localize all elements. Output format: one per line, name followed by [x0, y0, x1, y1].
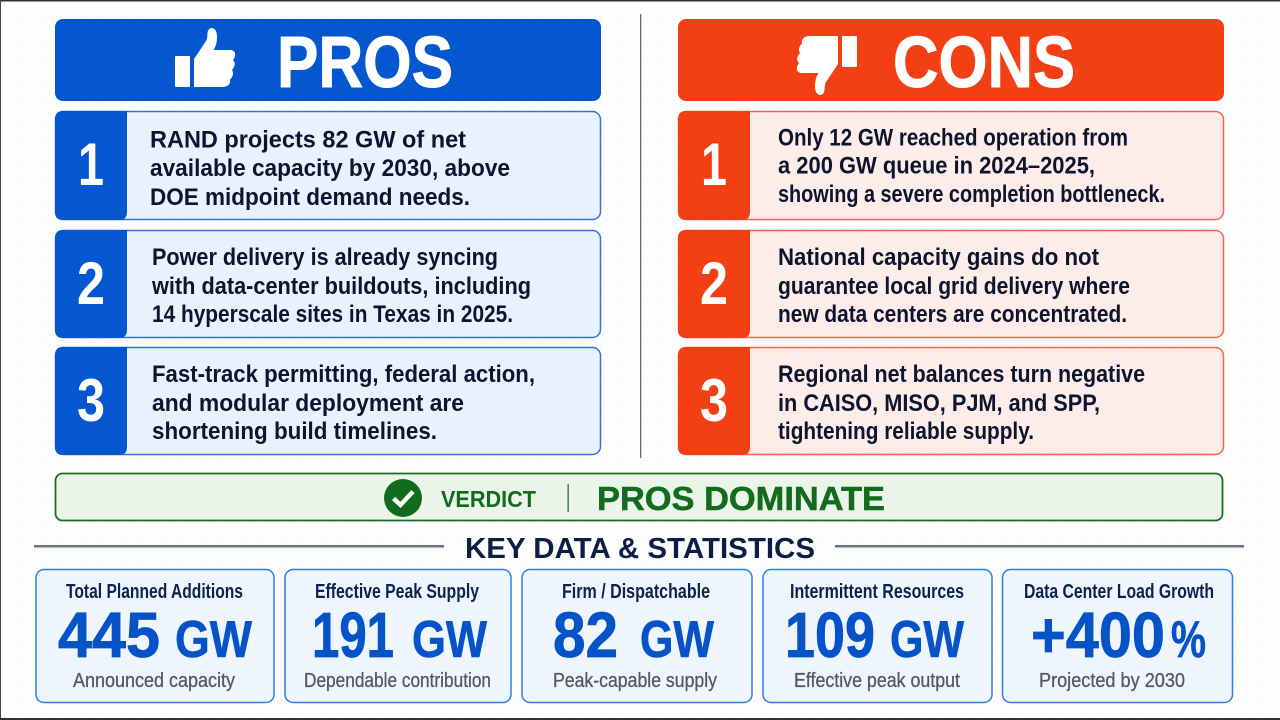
icon: check circle	[384, 479, 422, 517]
stat card: effective peak supply: Dependable contribution	[304, 670, 491, 692]
stat card: data center load growth: %	[1171, 611, 1206, 669]
con card 1: a 200 GW queue in 2024–2025,	[778, 152, 1095, 180]
con card 3: 3	[700, 367, 728, 434]
stat card: effective peak supply: 191	[312, 599, 394, 671]
pro card 3	[55, 347, 600, 455]
icon: thumbs down	[797, 36, 857, 95]
pro card 3: and modular deployment are	[152, 390, 464, 417]
con card 2: 2	[700, 250, 728, 317]
stat card: intermittent resources: Intermittent Resources	[790, 581, 964, 603]
panel: cons	[678, 19, 1224, 455]
con card 3	[678, 347, 1224, 455]
pros header	[55, 19, 601, 103]
con card 2	[678, 230, 1224, 338]
stat card: intermittent resources	[763, 570, 992, 702]
section heading: key data and statistics: KEY DATA & STATISTICS	[465, 533, 815, 565]
stat card: data center load growth: Projected by 2030	[1039, 670, 1185, 692]
stat card: total planned additions: Announced capacity	[73, 670, 235, 692]
pro card 1: DOE midpoint demand needs.	[150, 184, 470, 211]
pro card 1: RAND projects 82 GW of net	[150, 126, 466, 154]
stat card: effective peak supply: GW	[412, 611, 488, 669]
heading: CONS: CONS	[893, 23, 1075, 103]
stat card: data center load growth: Data Center Load Growth	[1024, 581, 1214, 603]
stat card: firm dispatchable: Peak-capable supply	[553, 670, 717, 692]
stat card: total planned additions	[36, 570, 274, 702]
stat card: intermittent resources: 109	[785, 599, 875, 671]
stat card: effective peak supply	[285, 570, 511, 702]
stat card: firm dispatchable: Firm / Dispatchable	[562, 581, 710, 603]
pro card 2: with data-center buildouts, including	[151, 273, 531, 300]
panel: pros	[55, 19, 601, 455]
con card 1: showing a severe completion bottleneck.	[778, 181, 1165, 208]
con card 3: tightening reliable supply.	[778, 418, 1034, 445]
stat card: total planned additions: Total Planned Additions	[66, 581, 243, 603]
pro card 2: 2	[77, 250, 105, 317]
icon: thumbs up	[175, 28, 235, 87]
pro card 3: Fast-track permitting, federal action,	[152, 361, 535, 388]
heading: PROS: PROS	[277, 23, 453, 103]
pro card 1	[55, 111, 600, 220]
stat card: intermittent resources: Effective peak output	[794, 670, 960, 692]
pro card 1: 1	[78, 131, 104, 198]
con card 1: 1	[701, 131, 727, 198]
verdict label: VERDICT	[441, 486, 536, 512]
con card 2: new data centers are concentrated.	[778, 301, 1127, 328]
stat card: firm dispatchable: GW	[640, 611, 715, 669]
con card 1	[678, 111, 1224, 220]
pro card 2: Power delivery is already syncing	[152, 244, 498, 271]
pro card 1: available capacity by 2030, above	[150, 155, 510, 182]
stat card: data center load growth: +400	[1031, 599, 1165, 671]
stat card: intermittent resources: GW	[890, 611, 965, 669]
stat card: effective peak supply: Effective Peak Supply	[315, 581, 480, 603]
cons header	[678, 19, 1224, 103]
verdict banner	[56, 474, 1222, 520]
pro card 2: 14 hyperscale sites in Texas in 2025.	[152, 301, 513, 328]
pro card 2	[55, 230, 600, 338]
con card 2: guarantee local grid delivery where	[778, 273, 1130, 300]
con card 3: in CAISO, MISO, PJM, and SPP,	[778, 390, 1100, 417]
stat card: total planned additions: GW	[175, 611, 253, 669]
pro card 3: 3	[77, 367, 105, 434]
con card 1: Only 12 GW reached operation from	[778, 124, 1128, 152]
stat card: total planned additions: 445	[58, 599, 160, 671]
stat card: firm dispatchable	[522, 570, 752, 702]
con card 3: Regional net balances turn negative	[778, 361, 1145, 388]
verdict result: PROS DOMINATE	[597, 480, 885, 517]
pro card 3: shortening build timelines.	[152, 418, 437, 445]
stat card: firm dispatchable: 82	[553, 599, 618, 671]
stat card: data center load growth	[1002, 570, 1232, 702]
con card 2: National capacity gains do not	[778, 244, 1099, 271]
